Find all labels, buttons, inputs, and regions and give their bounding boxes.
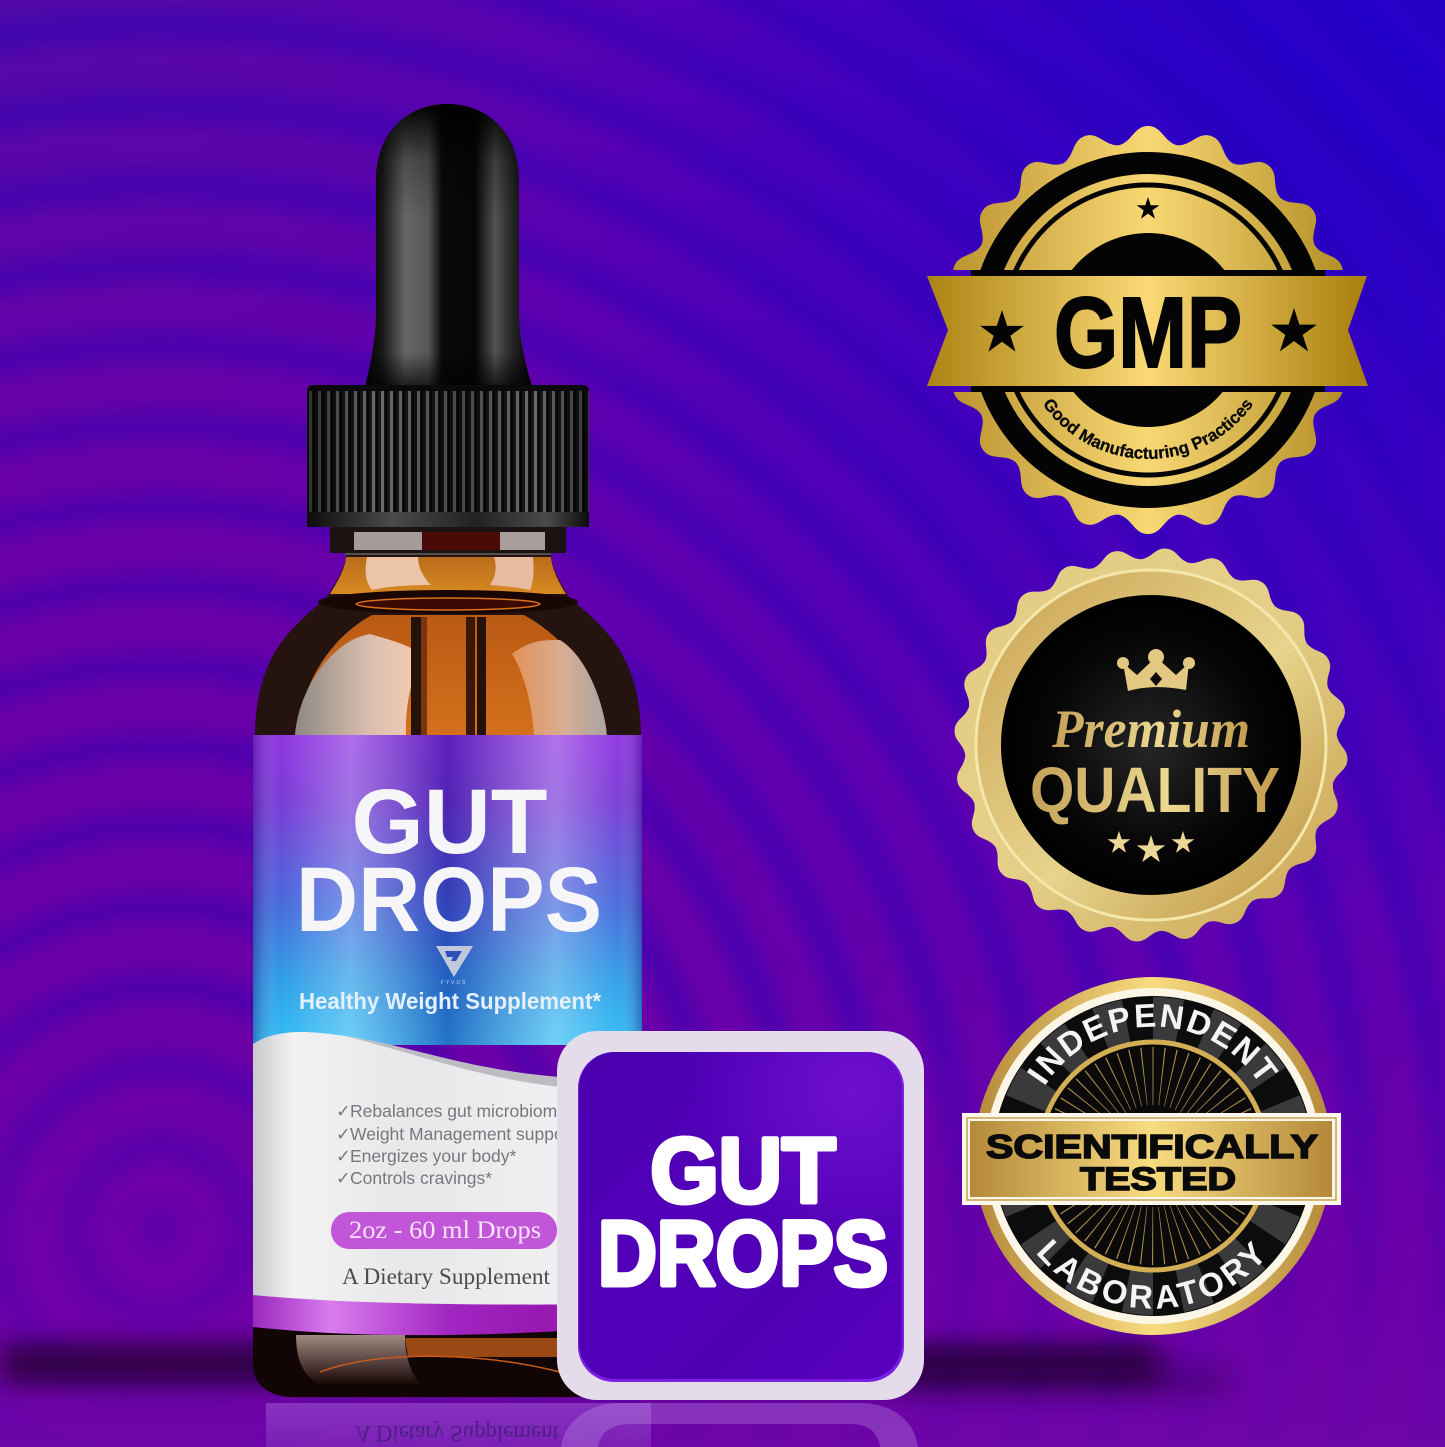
gut drops box <box>557 1031 924 1400</box>
brand name: DROPS <box>296 849 602 951</box>
benefits list: ✓ <box>336 1101 351 1121</box>
amber glass shoulder <box>255 555 641 737</box>
box brand name <box>598 1120 888 1305</box>
volume pill <box>331 1212 557 1249</box>
scalloped seal <box>953 126 1343 534</box>
box brand name: GUT <box>650 1120 836 1222</box>
benefits list: ✓ <box>336 1146 351 1166</box>
scalloped seal <box>950 544 1352 946</box>
neck ring <box>330 527 566 556</box>
curved text: Good Manufacturing Practices <box>1044 399 1252 460</box>
ribbon text <box>986 1128 1318 1197</box>
ribbon text: SCIENTIFICALLY <box>986 1128 1318 1165</box>
reflection <box>266 1403 918 1447</box>
benefits list: ✓ <box>336 1124 351 1144</box>
benefits list: Controls cravings* <box>350 1168 492 1188</box>
dropper collar <box>307 385 589 527</box>
tagline: Healthy Weight Supplement* <box>299 988 601 1014</box>
ribbon <box>962 1113 1341 1205</box>
brand name: GUT <box>352 771 548 873</box>
box brand name: DROPS <box>598 1203 888 1305</box>
benefits list: Rebalances gut microbiome* <box>350 1101 574 1121</box>
logo <box>436 946 473 986</box>
stars <box>1108 831 1194 862</box>
dropper bulb <box>365 104 532 386</box>
benefits list: ✓ <box>336 1168 351 1188</box>
label purple band <box>253 1295 642 1335</box>
badge: GMP <box>927 126 1368 534</box>
badge: scientifically tested <box>962 977 1341 1335</box>
star <box>1137 197 1159 219</box>
reflected caption: A Dietary Supplement <box>355 1421 560 1446</box>
GMP title: GMP <box>1054 277 1242 389</box>
dietary supplement: A Dietary Supplement <box>342 1264 551 1289</box>
volume pill: 2oz - 60 ml Drops <box>349 1217 541 1244</box>
floor shadow <box>0 1350 1230 1388</box>
arc text <box>1027 1004 1279 1309</box>
quality text: QUALITY <box>1030 754 1280 826</box>
label white panel <box>253 1032 642 1310</box>
ribbon <box>927 276 1368 386</box>
ribbon text: TESTED <box>1080 1161 1236 1197</box>
badge: premium quality <box>950 544 1352 946</box>
crown icon <box>1117 649 1195 691</box>
benefits list: Energizes your body* <box>350 1146 517 1166</box>
ribbon stars <box>980 308 1317 352</box>
logo: FYVUS <box>441 980 467 986</box>
product label <box>253 735 642 1335</box>
premium script: Premium <box>1051 699 1250 759</box>
arc text: INDEPENDENT <box>1027 1004 1279 1085</box>
benefits list <box>336 1101 581 1188</box>
arc text: LABORATORY <box>1036 1238 1262 1309</box>
dropper bottle <box>253 104 642 1397</box>
sunburst rays <box>1073 1076 1233 1236</box>
brand name <box>296 771 602 951</box>
bottle base <box>253 1325 642 1397</box>
benefits list: Weight Management support* <box>350 1124 581 1144</box>
reflected box <box>561 1403 918 1447</box>
